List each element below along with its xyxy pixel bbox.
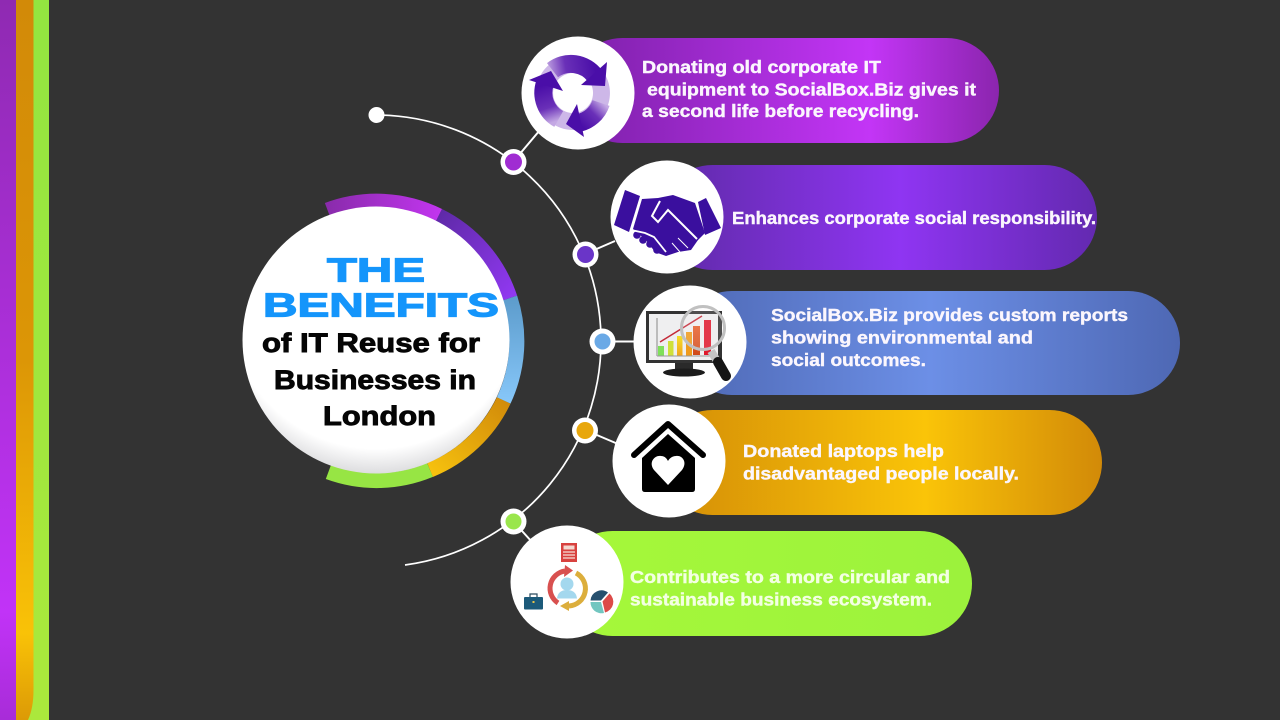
pill — [660, 165, 1097, 270]
icon: chart under magnifier — [634, 286, 746, 398]
white disc — [242, 206, 510, 474]
left stripes — [0, 0, 49, 720]
icon: handshake — [610, 160, 724, 274]
icon: business cycle — [510, 526, 624, 638]
node — [590, 328, 616, 354]
ring segment: amber — [430, 400, 504, 470]
briefcase — [524, 594, 543, 610]
connector — [602, 340, 636, 342]
connecting arc — [376, 115, 601, 565]
title text: of IT Reuse for — [262, 328, 481, 358]
connector — [585, 241, 615, 254]
text: Donating old corporate IT — [642, 57, 881, 77]
node — [500, 508, 526, 534]
ring segment: blue — [504, 298, 517, 400]
title text: BENEFITS — [263, 288, 499, 324]
node — [572, 418, 598, 444]
text: sustainable business ecosystem. — [630, 590, 932, 610]
ring segment: violet — [439, 216, 510, 298]
text: Enhances corporate social responsibility. — [732, 208, 1096, 228]
title text: Businesses in — [274, 365, 476, 395]
text: a second life before recycling. — [642, 101, 919, 121]
icon: house with heart — [612, 404, 726, 518]
pie — [590, 590, 613, 613]
row 4: local help — [572, 404, 1102, 518]
row 1: reuse — [500, 36, 999, 175]
calculator — [561, 543, 577, 562]
text: equipment to SocialBox.Biz gives it — [647, 80, 976, 100]
ring segment: purple — [328, 201, 439, 216]
ring segment: green — [328, 470, 430, 481]
text: Donated laptops help — [743, 441, 944, 461]
connector — [585, 430, 618, 444]
icon: recycling arrows — [522, 36, 634, 150]
text — [630, 567, 950, 610]
person — [557, 578, 577, 598]
pill — [570, 38, 999, 143]
text — [771, 305, 1128, 370]
cycle arrows — [550, 565, 585, 611]
text: social outcomes. — [771, 350, 926, 370]
row 2: corporate social responsibility — [572, 160, 1097, 274]
connector — [513, 130, 540, 162]
text: SocialBox.Biz provides custom reports — [771, 305, 1128, 325]
title text: THE — [327, 252, 425, 290]
node — [572, 242, 598, 268]
row 3: custom reports — [590, 286, 1180, 398]
connector — [513, 521, 532, 542]
text — [743, 441, 1019, 484]
pill — [560, 531, 972, 636]
row 5: circular economy — [500, 508, 972, 638]
pill — [660, 410, 1102, 515]
text: Contributes to a more circular and — [630, 567, 950, 587]
node — [500, 149, 526, 175]
arc start dot — [368, 107, 384, 123]
text: showing environmental and — [771, 328, 1033, 348]
text — [642, 57, 976, 121]
title text: London — [323, 401, 436, 431]
pill — [680, 291, 1180, 395]
text: disadvantaged people locally. — [743, 464, 1019, 484]
central title badge — [242, 201, 517, 481]
title text — [262, 252, 499, 431]
